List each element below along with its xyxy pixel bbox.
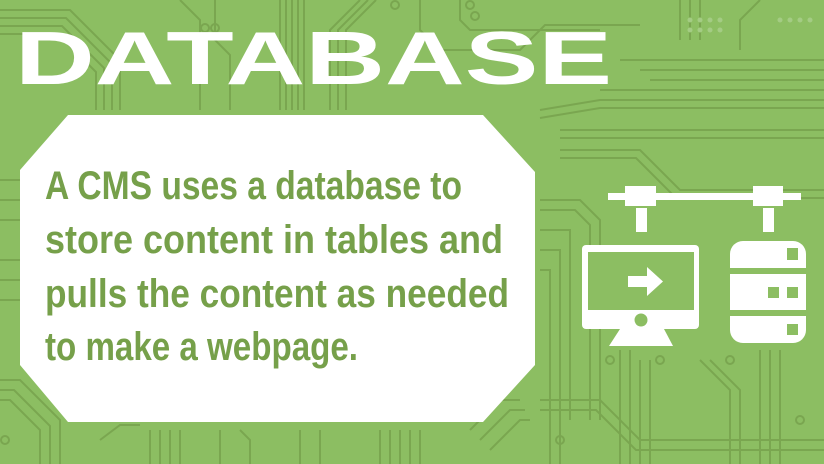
description text: pulls the content as needed [45, 272, 509, 316]
icon: computer connected to database [582, 186, 808, 346]
panel: description [20, 115, 535, 422]
icon: server [728, 241, 808, 343]
title: DATABASE [15, 17, 612, 101]
description text: A CMS uses a database to [45, 164, 462, 208]
description text: to make a webpage. [45, 325, 358, 369]
connection cable [608, 186, 801, 232]
description text: store content in tables and [45, 218, 503, 262]
icon: monitor [582, 245, 699, 346]
description text [45, 164, 509, 369]
